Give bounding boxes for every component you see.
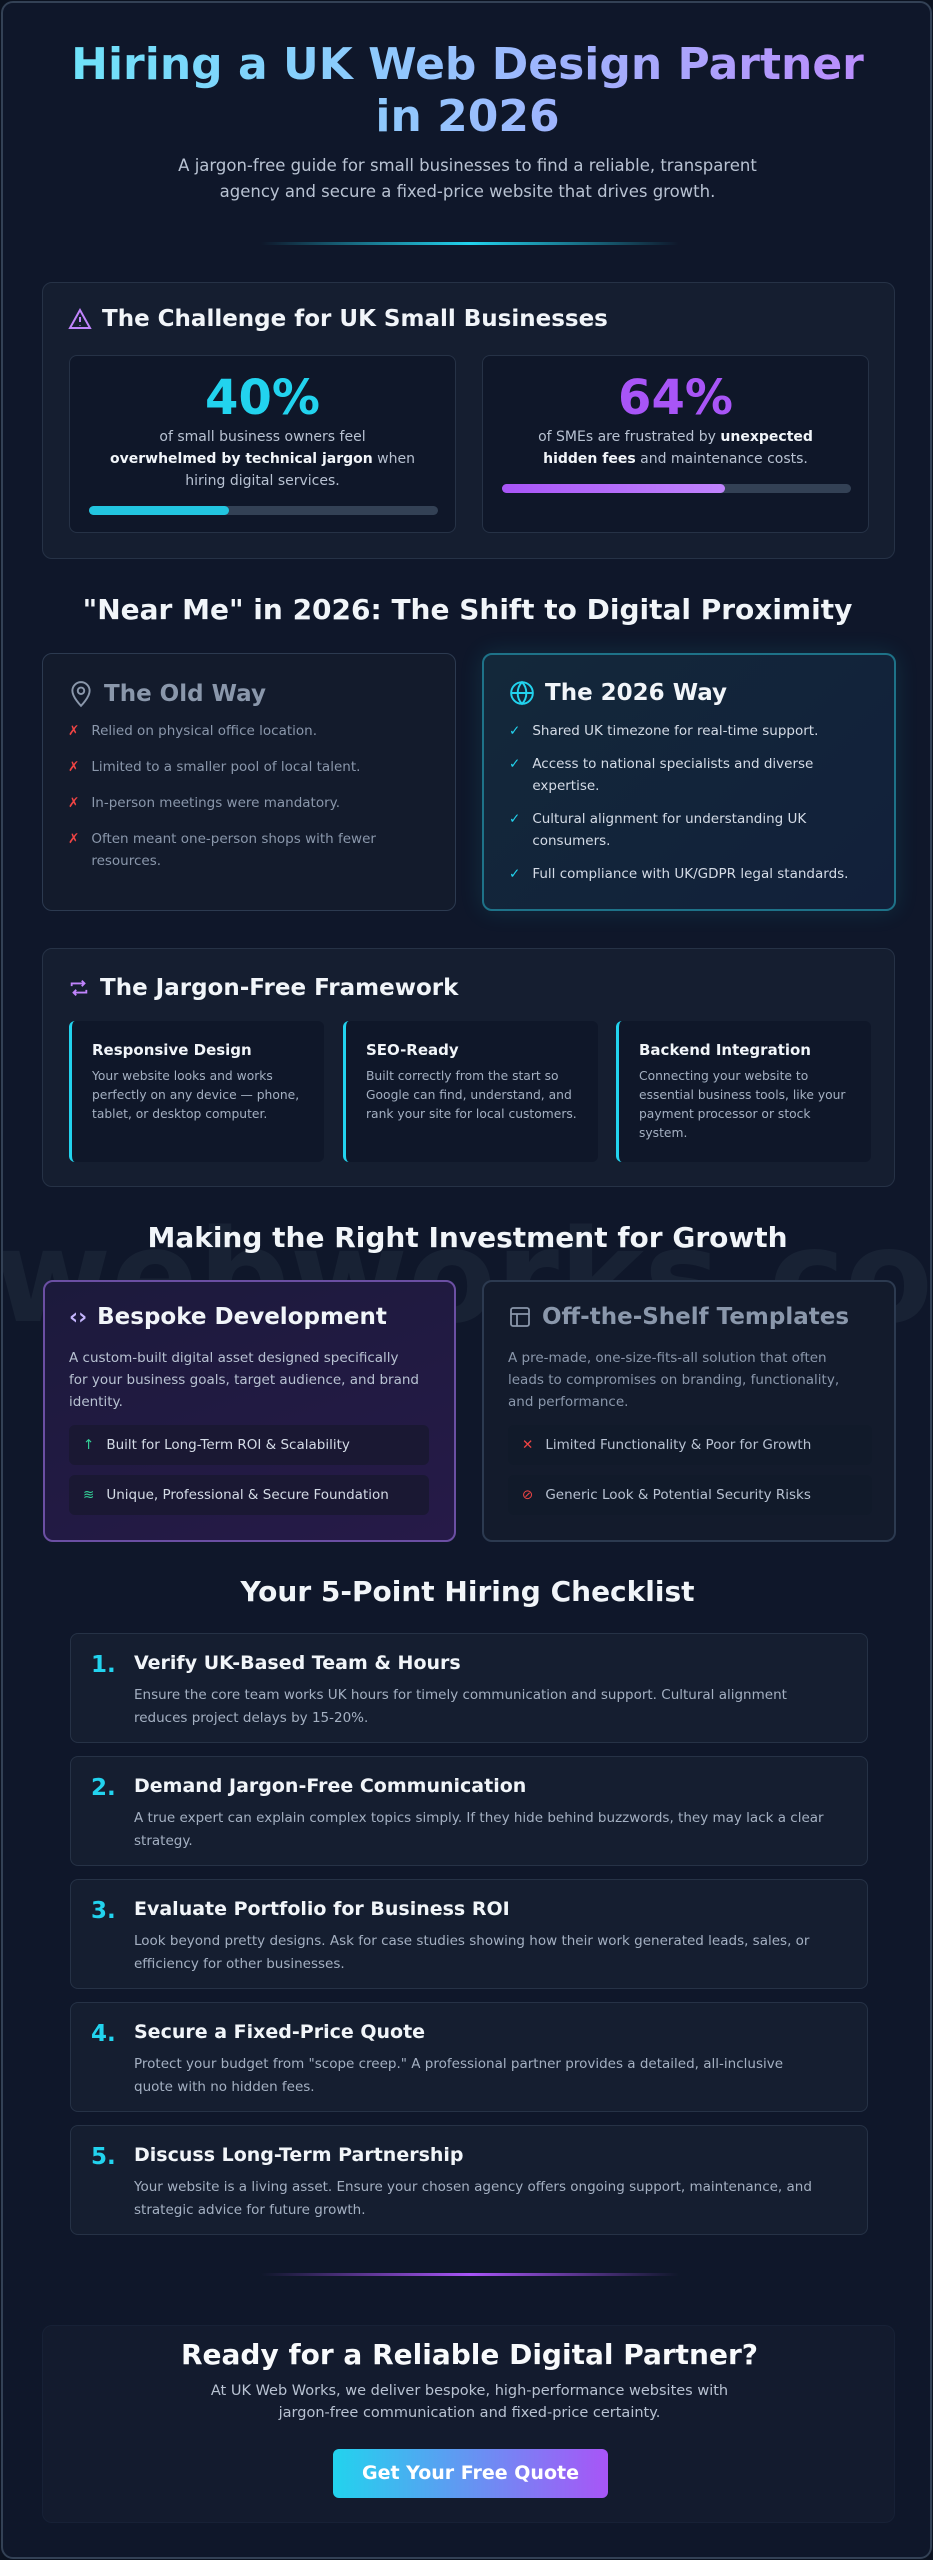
panel: 2026 way: Access to national specialists and diverse expertise. bbox=[532, 756, 813, 794]
title: Hiring a UK Web Design Partner bbox=[71, 39, 864, 90]
item 2 bbox=[70, 1756, 868, 1866]
card: backend: Backend Integration bbox=[639, 1041, 811, 1059]
heading: checklist: Your 5-Point Hiring Checklist bbox=[240, 1575, 695, 1608]
card: responsive bbox=[69, 1021, 324, 1162]
item 3: Look beyond pretty designs. Ask for case studies showing how their work generated leads, sales, or efficiency for other businesses. bbox=[134, 1933, 809, 1972]
panel: templates: Limited Functionality & Poor for Growth bbox=[545, 1437, 811, 1453]
item 4: Protect your budget from "scope creep." A professional partner provides a detailed, all-inclusive bbox=[134, 2056, 783, 2072]
panel: bespoke bbox=[43, 1280, 456, 1542]
panel: 2026 way bbox=[482, 653, 896, 911]
panel: bespoke: ≋ bbox=[83, 1487, 94, 1503]
item 1: Ensure the core team works UK hours for timely communication and support. Cultural alignment reduces project delays by 15-20%. bbox=[134, 1687, 787, 1726]
item 3: 3. bbox=[91, 1898, 116, 1924]
panel: framework: The Jargon-Free Framework bbox=[100, 975, 458, 1001]
heading: investment: Making the Right Investment for Growth bbox=[147, 1221, 788, 1254]
panel: templates: Off-the-Shelf Templates bbox=[542, 1304, 849, 1330]
stat: 40% bbox=[69, 355, 456, 533]
heading: near me: "Near Me" in 2026: The Shift to Digital Proximity bbox=[83, 593, 852, 626]
card: seo: SEO-Ready bbox=[366, 1041, 459, 1059]
panel: old way: ✗ bbox=[68, 723, 79, 739]
button bbox=[333, 2449, 608, 2498]
item 5 bbox=[70, 2125, 868, 2235]
subtitle: agency and secure a fixed-price website that drives growth. bbox=[220, 182, 715, 201]
panel: 2026 way: Shared UK timezone for real-time support. bbox=[532, 723, 818, 739]
panel: templates: Generic Look & Potential Security Risks bbox=[545, 1487, 811, 1503]
panel: 2026 way: The 2026 Way bbox=[545, 680, 727, 706]
panel: cta: Ready for a Reliable Digital Partner? bbox=[181, 2338, 758, 2371]
panel: old way: ✗ bbox=[68, 831, 79, 847]
panel: 2026 way: ✓ bbox=[509, 756, 520, 772]
panel: old way: In-person meetings were mandatory. bbox=[91, 795, 340, 811]
panel: old way: Often meant one-person shops with fewer resources. bbox=[91, 831, 376, 869]
panel: 2026 way: ✓ bbox=[509, 866, 520, 882]
panel: cta: At UK Web Works, we deliver bespoke, high-performance websites with jargon-free communication and fixed-price certainty. bbox=[211, 2383, 728, 2421]
item 4: Secure a Fixed-Price Quote bbox=[134, 2021, 425, 2043]
stat: 64%: 64% bbox=[618, 370, 733, 426]
panel: old way: ✗ bbox=[68, 759, 79, 775]
item 1 bbox=[70, 1633, 868, 1743]
card: responsive: Responsive Design bbox=[92, 1041, 252, 1059]
title: in 2026 bbox=[375, 91, 560, 142]
card: seo bbox=[343, 1021, 598, 1162]
panel: bespoke: A custom-built digital asset designed specifically for your business goals, target audience, and brand identity. bbox=[69, 1350, 419, 1410]
panel: 2026 way: Full compliance with UK/GDPR legal standards. bbox=[532, 866, 848, 882]
item 5: Your website is a living asset. Ensure your chosen agency offers ongoing support, maintenance, and strategic advice for future growth. bbox=[134, 2179, 812, 2218]
panel: old way bbox=[42, 653, 456, 911]
title bbox=[3, 39, 932, 143]
panel: framework bbox=[42, 948, 895, 1187]
panel: templates: ✕ bbox=[522, 1437, 533, 1453]
card: backend bbox=[616, 1021, 871, 1162]
button: Get Your Free Quote bbox=[362, 2462, 579, 2484]
panel: bespoke: ‹› bbox=[69, 1304, 87, 1330]
item 4: quote with no hidden fees. bbox=[134, 2079, 315, 2095]
panel: old way: ✗ bbox=[68, 795, 79, 811]
stat: 40%: of small business owners feel overwhelmed by technical jargon when hiring digital services. bbox=[110, 429, 415, 489]
card: backend: Connecting your website to essential business tools, like your payment processor or stock system. bbox=[639, 1069, 846, 1140]
stat: 40%: 40% bbox=[205, 370, 320, 426]
panel: templates: ⊘ bbox=[522, 1487, 533, 1503]
stat: 64%: of SMEs are frustrated by unexpected hidden fees and maintenance costs. bbox=[538, 429, 813, 467]
panel: bespoke: Unique, Professional & Secure Foundation bbox=[106, 1487, 389, 1503]
card: seo: Built correctly from the start so Google can find, understand, and rank your site for local customers. bbox=[366, 1069, 577, 1121]
item 2: Demand Jargon-Free Communication bbox=[134, 1775, 526, 1797]
item 5: 5. bbox=[91, 2144, 116, 2170]
panel: bespoke: Built for Long-Term ROI & Scalability bbox=[106, 1437, 350, 1453]
panel: challenge bbox=[42, 282, 895, 559]
item 2: A true expert can explain complex topics simply. If they hide behind buzzwords, they may lack a clear strategy. bbox=[134, 1810, 824, 1849]
panel: old way: Limited to a smaller pool of local talent. bbox=[91, 759, 360, 775]
panel: cta bbox=[42, 2325, 895, 2523]
item 4 bbox=[70, 2002, 868, 2112]
item 4: 4. bbox=[91, 2021, 116, 2047]
panel: templates: A pre-made, one-size-fits-all solution that often leads to compromises on branding, functionality, and performance. bbox=[508, 1350, 839, 1410]
panel: old way: The Old Way bbox=[104, 681, 266, 707]
panel: bespoke: Bespoke Development bbox=[97, 1304, 387, 1330]
panel: templates bbox=[482, 1280, 896, 1542]
panel: 2026 way: Cultural alignment for understanding UK consumers. bbox=[532, 811, 806, 849]
item 5: Discuss Long-Term Partnership bbox=[134, 2144, 464, 2166]
item 3: Evaluate Portfolio for Business ROI bbox=[134, 1898, 510, 1920]
panel: 2026 way: ✓ bbox=[509, 811, 520, 827]
subtitle: A jargon-free guide for small businesses to find a reliable, transparent bbox=[178, 156, 757, 175]
panel: old way: Relied on physical office location. bbox=[91, 723, 317, 739]
item 2: 2. bbox=[91, 1775, 116, 1801]
panel: 2026 way: ✓ bbox=[509, 723, 520, 739]
heading: challenge: The Challenge for UK Small Businesses bbox=[102, 306, 608, 332]
item 3 bbox=[70, 1879, 868, 1989]
card: responsive: Your website looks and works perfectly on any device — phone, tablet, or desktop computer. bbox=[92, 1069, 299, 1121]
item 1: 1. bbox=[91, 1652, 116, 1678]
subtitle bbox=[178, 156, 757, 201]
stat: 64% bbox=[482, 355, 869, 533]
panel: bespoke: ↑ bbox=[83, 1437, 94, 1453]
item 1: Verify UK-Based Team & Hours bbox=[134, 1652, 461, 1674]
